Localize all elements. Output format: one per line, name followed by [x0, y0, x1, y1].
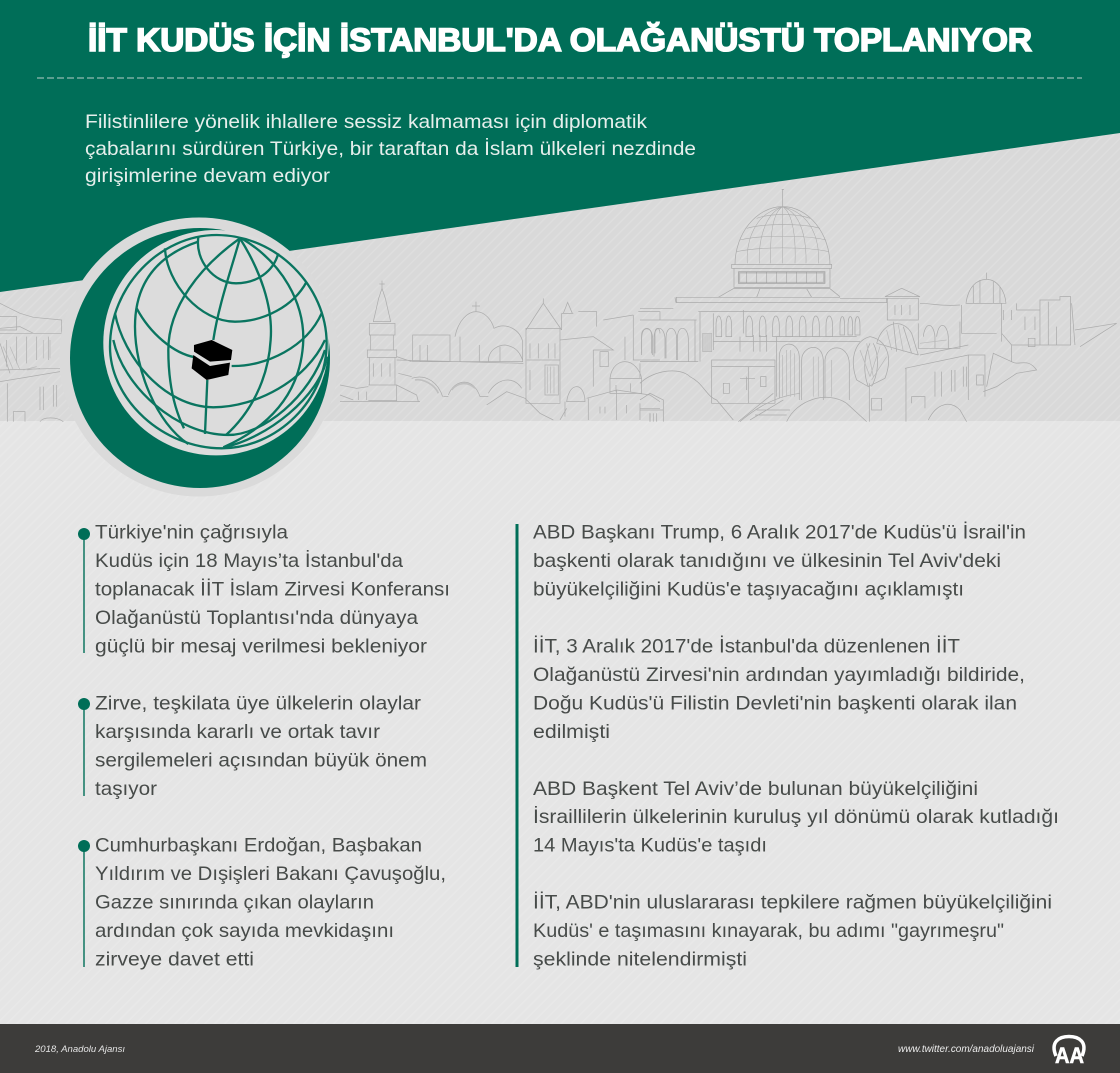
left column	[78, 522, 450, 970]
bullet 1: Olağanüstü Toplantısı'nda dünyaya	[95, 607, 418, 629]
bullet 2: sergilemeleri açısından büyük önem	[95, 750, 427, 772]
paragraph 2: edilmişti	[533, 721, 610, 743]
emblem: OIC crescent and globe	[60, 218, 338, 496]
green header panel	[0, 0, 1120, 292]
globe grid	[110, 235, 327, 448]
bullet 1: Türkiye'nin çağrısıyla	[95, 522, 288, 544]
paragraph 3: ABD Başkent Tel Aviv’de bulunan büyükelçiliğini	[533, 778, 978, 800]
dashed divider	[37, 77, 1082, 79]
paragraph 3: 14 Mayıs'ta Kudüs'e taşıdı	[533, 834, 767, 856]
bullet 1: toplanacak İİT İslam Zirvesi Konferansı	[95, 578, 450, 600]
bullet 2	[78, 692, 427, 800]
roof and main facade	[675, 289, 887, 303]
skyline sketch: middle towers and church	[340, 281, 660, 422]
bullet 3	[78, 834, 446, 970]
bullet 2: Zirve, teşkilata üye ülkelerin olaylar	[95, 692, 422, 714]
icon: Kaaba	[192, 340, 232, 380]
bullet 3: zirveye davet etti	[95, 948, 254, 970]
paragraph 4: şeklinde nitelendirmişti	[533, 948, 747, 970]
bullet 3: Cumhurbaşkanı Erdoğan, Başbakan	[95, 834, 422, 856]
paragraph 1: ABD Başkanı Trump, 6 Aralık 2017'de Kudüs'ü İsrail'in	[533, 520, 1026, 544]
footer bar	[0, 1024, 1120, 1073]
paragraph 2	[533, 634, 1025, 743]
bullet 1	[78, 522, 450, 658]
bullet 3: Gazze sınırında çıkan olayların	[95, 892, 374, 914]
right column	[516, 520, 1059, 970]
far left fragments	[640, 371, 733, 422]
lower background panel	[0, 421, 1120, 1024]
lower arches	[740, 337, 857, 422]
logo: Anadolu Agency: AA	[1055, 1043, 1084, 1068]
bullet 3: Yıldırım ve Dışişleri Bakanı Çavuşoğlu,	[95, 863, 446, 885]
paragraph 3	[533, 778, 1059, 856]
upper right buildings	[885, 288, 997, 333]
skyline sketch: dome and mosque	[640, 189, 1117, 422]
paragraph 3: İsraillilerin ülkelerinin kuruluş yıl dönümü olarak kutladığı	[533, 805, 1059, 828]
left arcade	[640, 308, 698, 362]
grey skyline band	[0, 120, 1120, 421]
paragraph 1: başkenti olarak tanıdığını ve ülkesinin Tel Aviv'deki	[533, 550, 1001, 572]
paragraph 2: İİT, 3 Aralık 2017'de İstanbul'da düzenlenen İİT	[533, 634, 960, 658]
bullet 2: taşıyor	[95, 778, 158, 800]
paragraph 1	[533, 520, 1026, 600]
copyright: 2018, Anadolu Ajansı	[34, 1044, 125, 1055]
paragraph 4	[533, 890, 1052, 970]
paragraph 2: Olağanüstü Zirvesi'nin ardından yayımladığı bildiride,	[533, 664, 1025, 686]
palm tree	[853, 337, 889, 422]
twitter address: www.twitter.com/anadoluajansi	[898, 1043, 1035, 1055]
intro text: girişimlerine devam ediyor	[85, 165, 331, 187]
small dome and right wing	[877, 322, 968, 355]
dome	[735, 189, 830, 265]
skyline sketch: left fragment	[0, 303, 63, 422]
bullet 2: karşısında kararlı ve ortak tavır	[95, 721, 381, 743]
drum	[732, 264, 832, 287]
paragraph 4: İİT, ABD'nin uluslararası tepkilere rağmen büyükelçiliğini	[533, 890, 1052, 914]
bullet 3: ardından çok sayıda mevkidaşını	[95, 920, 394, 942]
bullet 1: güçlü bir mesaj verilmesi bekleniyor	[95, 636, 428, 658]
paragraph 1: büyükelçiliğini Kudüs'e taşıyacağını açıklamıştı	[533, 578, 964, 600]
paragraph 2: Doğu Kudüs'ü Filistin Devleti'nin başkenti olarak ilan	[533, 692, 1017, 714]
intro text	[85, 111, 696, 187]
intro text: Filistinlilere yönelik ihlallere sessiz kalmaması için diplomatik	[85, 111, 647, 133]
paragraph 4: Kudüs' e taşımasını kınayarak, bu adımı "gayrımeşru"	[533, 920, 1004, 942]
title: İİT KUDÜS İÇİN İSTANBUL'DA OLAĞANÜSTÜ TOPLANIYOR	[88, 22, 1032, 58]
intro text: çabalarını sürdüren Türkiye, bir taraftan da İslam ülkeleri nezdinde	[85, 137, 696, 160]
bullet 1: Kudüs için 18 Mayıs’ta İstanbul'da	[95, 549, 403, 572]
